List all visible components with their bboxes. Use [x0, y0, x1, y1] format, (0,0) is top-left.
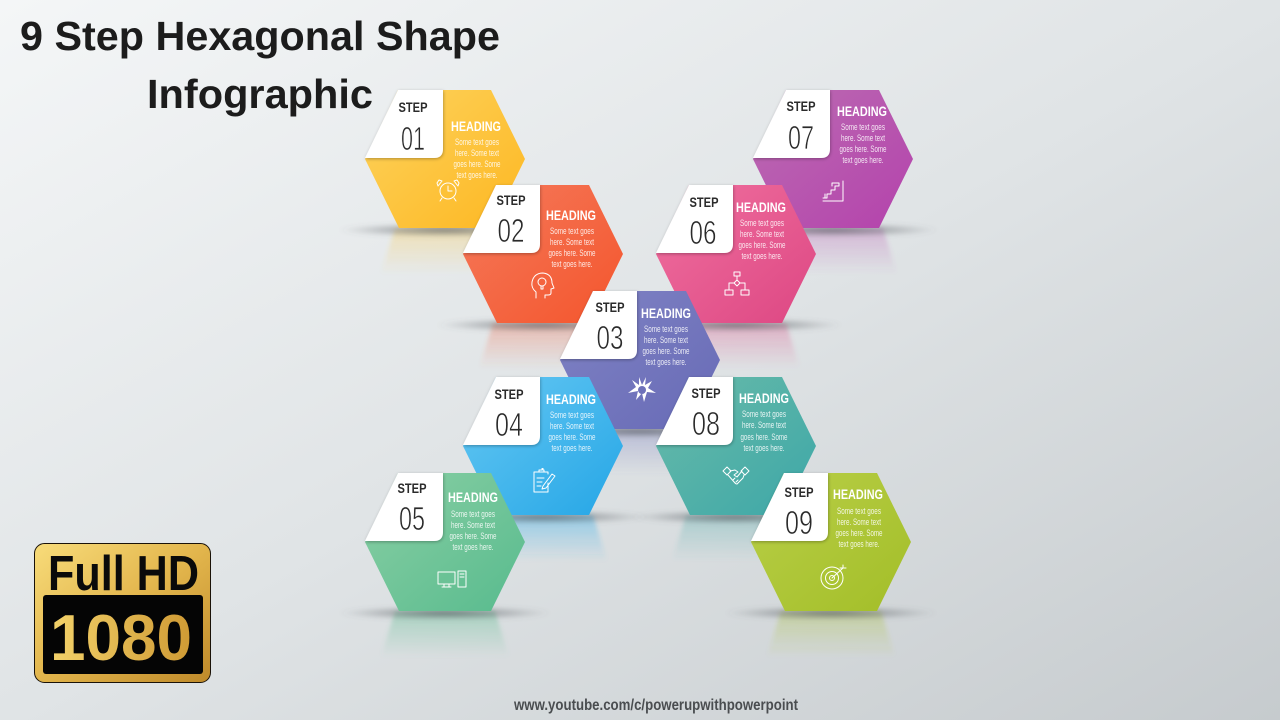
floor shadow 03 [534, 424, 746, 438]
badge: Full HD 1080 [34, 544, 210, 682]
reflection 03 [576, 429, 704, 475]
hexagon 04 [463, 377, 623, 515]
badge inner panel [43, 595, 203, 674]
body text 04 [548, 410, 596, 454]
body text 08: Some text goes [742, 409, 786, 420]
body text 01: text goes here. [456, 170, 498, 181]
body text 02: Some text goes [550, 226, 594, 237]
title: Infographic [147, 71, 373, 117]
white tab 08 [656, 377, 733, 445]
icon: head with lightbulb [532, 273, 554, 298]
body text 05: text goes here. [452, 542, 494, 553]
floor shadow 01 [339, 223, 551, 237]
body text 03: here. Some text [644, 335, 688, 346]
step label 05: STEP [398, 481, 426, 496]
body text 03: goes here. Some [642, 346, 690, 357]
body text 01: here. Some text [455, 148, 499, 159]
body text 09: text goes here. [838, 539, 880, 550]
body text 07: goes here. Some [840, 144, 886, 155]
body text 02: text goes here. [552, 259, 592, 270]
hexagon 03 [560, 291, 720, 429]
panel: step 03 [534, 291, 746, 475]
floor shadow 09 [725, 606, 937, 620]
heading 08: HEADING [739, 391, 789, 406]
body text 06: text goes here. [742, 251, 782, 262]
hexagon 06 [656, 185, 816, 323]
body text 09 [836, 506, 882, 550]
body text 06: here. Some text [740, 229, 784, 240]
reflection 04 [479, 515, 607, 561]
footer url: www.youtube.com/c/powerupwithpowerpoint [513, 697, 798, 714]
body text 07: Some text goes [841, 122, 885, 133]
body text 07 [840, 122, 886, 166]
body text 07: here. Some text [841, 133, 885, 144]
body text 05: here. Some text [451, 520, 495, 531]
icon: desktop computer [438, 571, 466, 587]
panel: step 01 [339, 90, 551, 274]
step label 07: STEP [786, 99, 816, 114]
icon: stairs [823, 181, 843, 201]
heading 02: HEADING [546, 208, 596, 223]
icon: team circle [628, 377, 656, 402]
hexagon 08 [656, 377, 816, 515]
step label 02: STEP [496, 193, 526, 208]
hexagon 09 [751, 473, 911, 611]
number 01: 01 [401, 120, 425, 157]
icon: alarm clock [437, 180, 459, 201]
body text 08: here. Some text [742, 420, 786, 431]
body text 06: goes here. Some [738, 240, 786, 251]
body text 08 [740, 409, 788, 454]
reflection 08 [672, 515, 800, 561]
panel: step 09 [725, 473, 937, 657]
body text 04: Some text goes [550, 410, 594, 421]
number 04: 04 [495, 406, 523, 443]
reflection 09 [767, 611, 895, 657]
body text 06: Some text goes [740, 218, 784, 229]
body text 05: goes here. Some [450, 531, 496, 542]
white tab 06 [656, 185, 733, 253]
panel: step 08 [630, 377, 842, 561]
floor shadow 04 [437, 510, 649, 524]
number 03: 03 [596, 319, 624, 356]
white tab 01 [365, 90, 443, 158]
floor shadow 05 [339, 606, 551, 620]
badge label: Full HD [48, 547, 199, 601]
heading 05: HEADING [448, 490, 498, 505]
heading 09: HEADING [833, 487, 883, 502]
body text 09: Some text goes [837, 506, 881, 517]
white tab 05 [365, 473, 443, 541]
body text 09: here. Some text [837, 517, 881, 528]
heading 07: HEADING [837, 104, 887, 119]
title: 9 Step Hexagonal Shape [20, 13, 500, 59]
step label 08: STEP [692, 386, 720, 401]
floor shadow 02 [437, 318, 649, 332]
step label 06: STEP [690, 195, 718, 210]
panel: step 02 [437, 185, 649, 369]
number 09: 09 [785, 504, 813, 541]
reflection 05 [381, 611, 509, 657]
number 08: 08 [692, 405, 720, 442]
body text 03: Some text goes [644, 324, 688, 335]
floor shadow 06 [630, 318, 842, 332]
body text 05: Some text goes [451, 509, 495, 520]
icon: flow chart [725, 272, 749, 295]
heading 03: HEADING [641, 306, 691, 321]
icon: target with arrow [821, 565, 846, 589]
heading 06: HEADING [736, 200, 786, 215]
hexagon 01 [365, 90, 525, 228]
body text 01: Some text goes [455, 137, 499, 148]
hexagon 02 [463, 185, 623, 323]
body text 08: goes here. Some [740, 432, 788, 443]
step label 03: STEP [596, 300, 624, 315]
white tab 09 [751, 473, 828, 541]
body text 02 [548, 226, 596, 270]
hexagon 05 [365, 473, 525, 611]
body text 01: goes here. Some [454, 159, 500, 170]
body text 05 [450, 509, 496, 553]
panel: step 04 [437, 377, 649, 561]
reflection 07 [769, 228, 897, 274]
white tab 07 [753, 90, 830, 158]
body text 07: text goes here. [842, 155, 884, 166]
number 05: 05 [399, 500, 425, 537]
white tab 04 [463, 377, 540, 445]
step label 09: STEP [784, 485, 814, 500]
floor shadow 08 [630, 510, 842, 524]
body text 04: text goes here. [552, 443, 592, 454]
floor shadow 07 [727, 223, 939, 237]
number 06: 06 [690, 214, 716, 251]
heading 04: HEADING [546, 392, 596, 407]
body text 04: here. Some text [550, 421, 594, 432]
number 02: 02 [498, 212, 524, 249]
icon: handshake [723, 467, 749, 484]
reflection 02 [479, 323, 607, 369]
body text 04: goes here. Some [548, 432, 596, 443]
hexagon 07 [753, 90, 913, 228]
body text 01 [454, 137, 500, 181]
body text 06 [738, 218, 786, 262]
body text 08: text goes here. [744, 443, 784, 454]
white tab 03 [560, 291, 637, 359]
panel: step 05 [339, 473, 551, 657]
heading 01: HEADING [451, 119, 501, 134]
body text 02: here. Some text [550, 237, 594, 248]
body text 03 [642, 324, 690, 368]
number 07: 07 [788, 119, 814, 156]
reflection 01 [381, 228, 509, 274]
white tab 02 [463, 185, 540, 253]
body text 02: goes here. Some [548, 248, 596, 259]
icon: clipboard and pen [534, 468, 555, 492]
title [20, 13, 500, 117]
step label 01: STEP [398, 100, 428, 115]
body text 09: goes here. Some [836, 528, 882, 539]
reflection 06 [672, 323, 800, 369]
body text 03: text goes here. [646, 357, 686, 368]
step label 04: STEP [494, 387, 524, 402]
badge number: 1080 [50, 601, 192, 674]
panel: step 06 [630, 185, 842, 369]
panel: step 07 [727, 90, 939, 274]
